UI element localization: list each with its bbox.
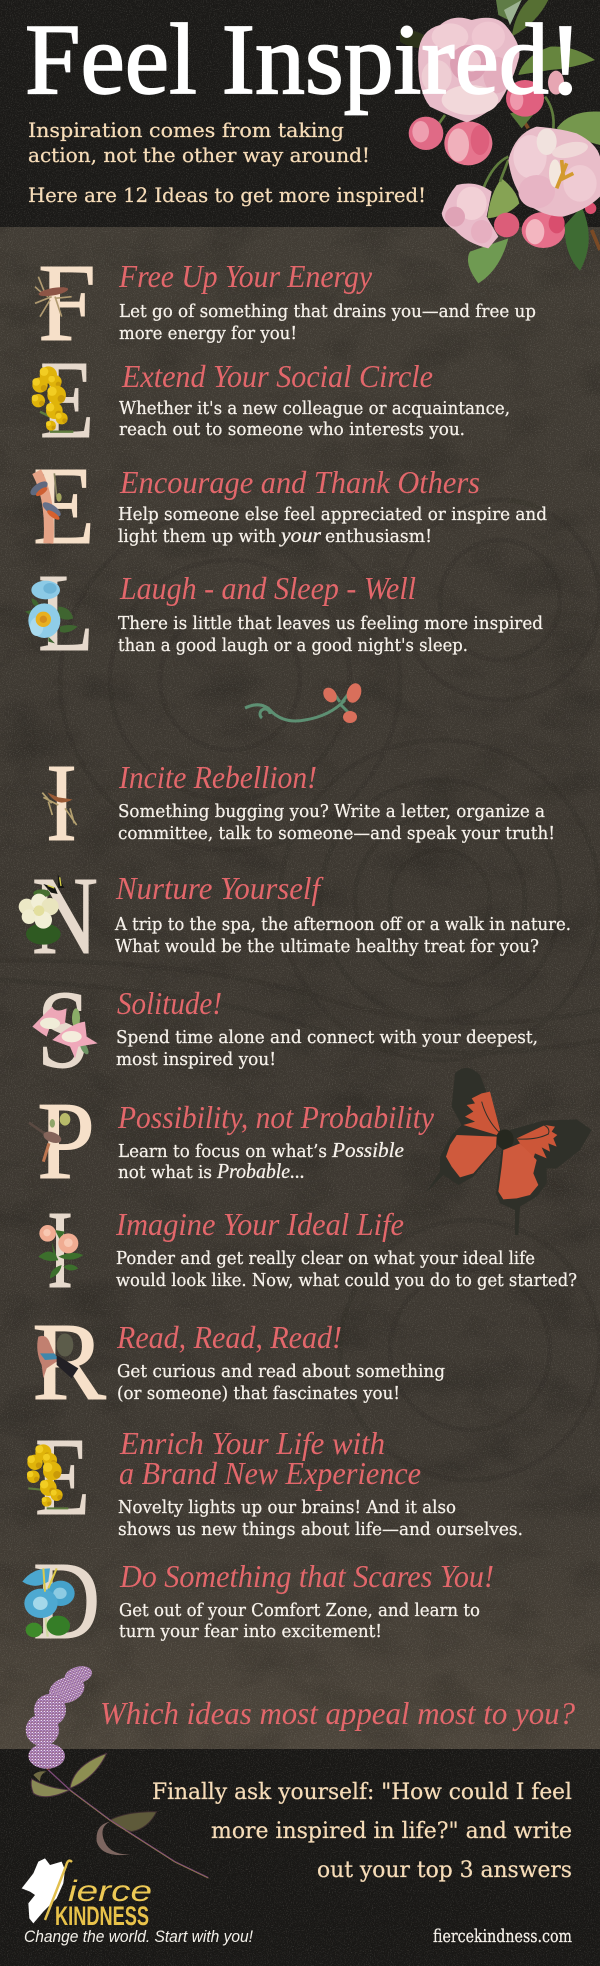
letter F with bird: F bbox=[38, 242, 96, 365]
item: Do Something that Scares You! bbox=[22, 1540, 494, 1663]
rose one bbox=[418, 18, 519, 122]
description: What would be the ultimate healthy treat for you? bbox=[115, 936, 539, 957]
description: (or someone) that fascinates you! bbox=[117, 1383, 400, 1404]
heading one: Enrich Your Life with bbox=[119, 1425, 385, 1461]
description: most inspired you! bbox=[116, 1049, 276, 1070]
description bbox=[116, 1248, 577, 1291]
question: Which ideas most appeal most to you? bbox=[100, 1695, 575, 1731]
description bbox=[119, 398, 510, 440]
description bbox=[119, 1600, 480, 1642]
intro text: Here are 12 Ideas to get more inspired! bbox=[28, 183, 426, 207]
item: Free Up Your Energy bbox=[35, 242, 536, 365]
letter I with peach roses: I bbox=[47, 1189, 73, 1312]
heading: Encourage and Thank Others bbox=[119, 464, 480, 500]
heading: Do Something that Scares You! bbox=[119, 1558, 494, 1594]
item: Read, Read, Read! bbox=[32, 1301, 445, 1424]
rose two bbox=[508, 127, 600, 217]
heading: Laugh - and Sleep - Well bbox=[119, 570, 416, 606]
description: There is little that leaves us feeling more inspired bbox=[118, 613, 543, 634]
description: turn your fear into excitement! bbox=[119, 1621, 382, 1642]
description: Probable... bbox=[216, 1159, 305, 1183]
closing text: more inspired in life?" and write bbox=[211, 1818, 572, 1844]
letter N with white flowers and butterfly: N bbox=[32, 855, 98, 978]
description: Ponder and get really clear on what your ideal life bbox=[116, 1248, 535, 1269]
letter R with bird: R bbox=[32, 1301, 106, 1424]
heading: Read, Read, Read! bbox=[116, 1319, 342, 1355]
letter E with birds: E bbox=[33, 445, 95, 568]
stems bbox=[520, 115, 600, 250]
item: Possibility, not Probability bbox=[29, 1080, 435, 1203]
intro text bbox=[28, 118, 426, 207]
item: Laugh - and Sleep - Well bbox=[25, 552, 543, 675]
description: Possible bbox=[331, 1138, 404, 1162]
heading: Incite Rebellion! bbox=[118, 759, 317, 795]
description bbox=[114, 914, 571, 957]
description: committee, talk to someone—and speak your truth! bbox=[118, 823, 555, 844]
description: Learn to focus on what’s bbox=[118, 1141, 327, 1162]
description: not what is bbox=[118, 1162, 212, 1183]
heading: Imagine Your Ideal Life bbox=[115, 1206, 404, 1242]
description: Spend time alone and connect with your deepest, bbox=[116, 1027, 538, 1048]
heading two: a Brand New Experience bbox=[119, 1455, 421, 1491]
closing text: Finally ask yourself: "How could I feel bbox=[152, 1779, 572, 1805]
description bbox=[119, 301, 536, 344]
rose three bbox=[442, 183, 498, 248]
description: enthusiasm! bbox=[325, 526, 432, 547]
item: Nurture Yourself bbox=[19, 855, 571, 978]
heading: Possibility, not Probability bbox=[117, 1099, 435, 1135]
description: Get curious and read about something bbox=[117, 1361, 445, 1382]
item: Imagine Your Ideal Life bbox=[38, 1189, 577, 1312]
letter P with bird: P bbox=[37, 1080, 95, 1203]
item: Extend Your Social Circle bbox=[32, 339, 510, 462]
description bbox=[118, 504, 547, 547]
description bbox=[118, 1138, 404, 1183]
logo bbox=[22, 1858, 253, 1946]
heading: Free Up Your Energy bbox=[118, 258, 373, 294]
letter L with blue flowers: L bbox=[38, 552, 94, 675]
item: Enrich Your Life with a Brand New Experience bbox=[27, 1416, 523, 1540]
description: A trip to the spa, the afternoon off or a walk in nature. bbox=[114, 914, 571, 935]
description bbox=[116, 1027, 538, 1070]
logo: ierce bbox=[68, 1875, 152, 1908]
buds bbox=[409, 71, 596, 248]
logo: KINDNESS bbox=[55, 1901, 149, 1931]
description: Help someone else feel appreciated or inspire and bbox=[118, 504, 547, 525]
letter L with blue flowers bbox=[25, 552, 94, 675]
description: Something bugging you? Write a letter, organize a bbox=[118, 801, 545, 822]
heading: Extend Your Social Circle bbox=[121, 358, 433, 394]
title: Feel Inspired! bbox=[25, 3, 582, 115]
item: Encourage and Thank Others bbox=[28, 445, 547, 568]
intro text: action, not the other way around! bbox=[28, 143, 370, 167]
description: Novelty lights up our brains! And it also bbox=[118, 1497, 456, 1518]
letter I with bird: I bbox=[46, 742, 77, 865]
description bbox=[118, 613, 543, 656]
letter S with orchids: S bbox=[37, 969, 90, 1092]
closing text bbox=[152, 1779, 572, 1883]
description bbox=[117, 1361, 445, 1404]
description: shows us new things about life—and ourselves. bbox=[118, 1519, 523, 1540]
description: light them up with bbox=[118, 526, 276, 547]
letter D with blue flowers: D bbox=[33, 1540, 100, 1663]
heading: Nurture Yourself bbox=[115, 870, 324, 906]
letter E with yellow flowers: E bbox=[40, 339, 94, 462]
item: Solitude! bbox=[32, 969, 538, 1092]
closing text: out your top 3 answers bbox=[317, 1857, 572, 1883]
ornament: flower sprig bbox=[245, 681, 364, 723]
description: your bbox=[279, 523, 322, 547]
item: Incite Rebellion! bbox=[42, 742, 555, 865]
description: than a good laugh or a good night's sleep. bbox=[118, 635, 468, 656]
description bbox=[118, 1497, 523, 1540]
description: Let go of something that drains you—and free up bbox=[119, 301, 536, 322]
description: Get out of your Comfort Zone, and learn to bbox=[119, 1600, 480, 1621]
description: more energy for you! bbox=[119, 323, 297, 344]
description: reach out to someone who interests you. bbox=[119, 419, 465, 440]
heading: Solitude! bbox=[117, 985, 222, 1021]
illustration: lilac sprig bbox=[26, 1663, 208, 1878]
illustration: rose cluster bbox=[400, 0, 600, 283]
logo: Change the world. Start with you! bbox=[24, 1927, 253, 1946]
illustration: butterfly bbox=[427, 1068, 592, 1235]
description: Whether it's a new colleague or acquaintance, bbox=[119, 398, 510, 419]
leaves bbox=[400, 0, 600, 283]
description bbox=[118, 801, 555, 844]
intro text: Inspiration comes from taking bbox=[28, 118, 344, 142]
letter E with yellow flowers: E bbox=[35, 1416, 90, 1539]
